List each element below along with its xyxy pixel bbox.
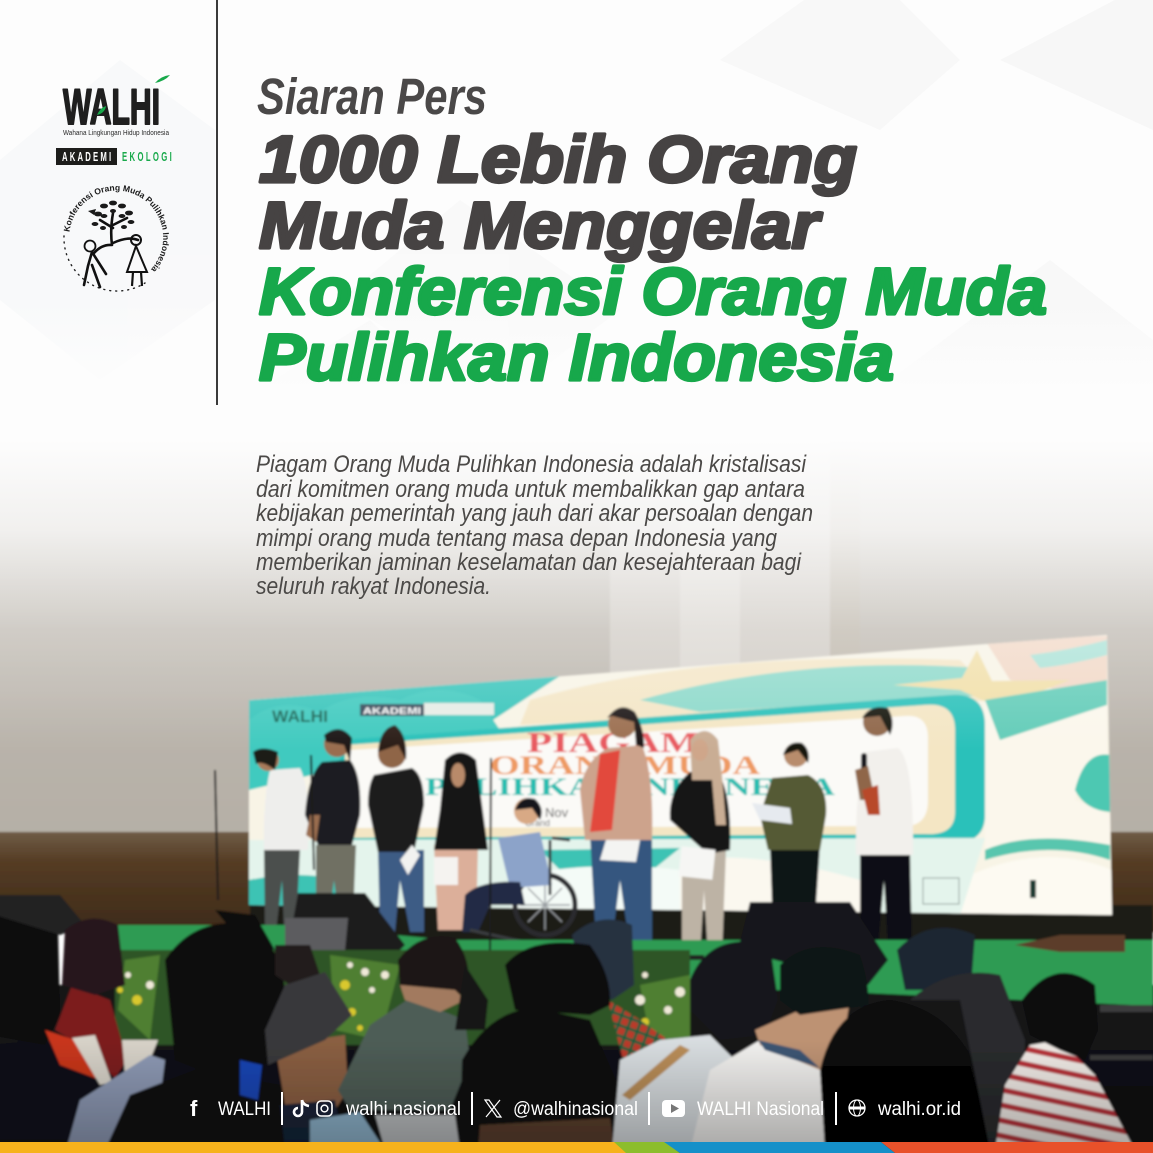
audience: far-left person [0,895,105,1150]
body paragraph: seluruh rakyat Indonesia. [256,573,491,600]
screen: lower illustration [249,838,985,915]
Konferensi Orang Muda emblem: Konferensi Orang Muda Pulihkan Indonesia [64,185,169,272]
body paragraph [256,451,813,600]
screen: title text: PIAGAM [527,728,699,759]
photo: microphone stands [215,755,491,950]
vertical divider [216,0,218,405]
photo: right floor speaker [738,902,888,985]
Akademi Ekologi badge: EKOLOGI [122,151,174,165]
title [259,122,1047,394]
Akademi Ekologi badge: AKADEMI [62,151,113,165]
heading: Siaran Pers: Siaran Pers [257,68,487,125]
TikTok and Instagram [294,1099,461,1120]
Facebook: WALHI [218,1099,271,1120]
audience: grey shirt man [338,936,488,1110]
logo column [56,75,174,292]
photo: wood panel band [0,832,1153,932]
body paragraph: kebijakan pemerintah yang jauh dari akar persoalan dengan [256,500,813,527]
website: walhi.or.id [877,1099,961,1120]
audience: striped shirt [995,973,1135,1150]
photo: LED screen: AKADEMI [363,706,421,716]
person 6: tall man [580,707,652,948]
audience: curly head [897,928,975,990]
YouTube: WALHI Nasional [697,1099,824,1120]
photo: stage skirt [250,905,1153,943]
photo: LED screen: Grand [525,818,550,828]
photo: hall wall [0,400,1153,840]
body paragraph: memberikan jaminan keselamatan dan kesejahteraan bagi [256,549,802,576]
audience: hijab woman in red [45,919,127,1080]
audience: second white shirt [690,947,868,1150]
social media footer [190,1092,961,1125]
TikTok and Instagram: walhi.nasional [345,1099,461,1120]
title line 3 green: Konferensi Orang Muda [259,254,1047,328]
photo: flower arrangement [115,950,690,1045]
WALHI logo [63,75,170,137]
person 4: hijab woman [434,752,488,930]
person 7: beige hijab [670,731,730,955]
photo: guitar on stage [1015,935,1125,952]
audience: stage steps highlight [1090,1005,1153,1060]
photo: audience centre [460,919,668,1150]
colour bar [0,1142,1153,1153]
person 1 [253,748,309,932]
event photo: stage and audience [0,484,1153,1153]
body paragraph: mimpi orang muda tentang masa depan Indonesia yang [256,525,778,552]
Facebook [190,1096,271,1121]
photo: audience right [612,928,1153,1150]
Akademi Ekologi badge [56,148,174,165]
audience: cap man [240,945,352,1150]
photo: green stage floor [115,925,1153,1006]
body paragraph: Piagam Orang Muda Pulihkan Indonesia adalah kristalisasi [256,451,807,478]
screen: star [894,650,1067,701]
X: @walhinasional [513,1099,638,1120]
background triangle pattern [0,0,1153,440]
audience: cap and plaid shirt [572,919,668,1068]
audience: big dark head [105,910,310,1150]
WALHI logo: Wahana Lingkungan Hidup Indonesia [63,130,169,137]
audience: central black hair [460,1008,620,1150]
person 3 [368,725,424,932]
screen: teal frame [340,695,985,848]
person 5: wheelchair user [462,798,575,950]
photo: dark audience base [0,985,1153,1153]
audience: white shirt with bag strap [612,942,778,1150]
audience: light-blue sleeve and seat back [310,1112,460,1150]
photo: LED screen: Nov [545,805,569,820]
photo: LED screen: ORANG MUDA [490,751,760,780]
photo: left floor speaker [285,893,405,965]
title line 1: 1000 Lebih Orang [259,122,857,196]
person 9: speaker with microphone [855,707,913,948]
WALHI logo: WALHI [63,79,160,135]
white fade over photo [0,300,1153,750]
screen: logos: WALHI [272,707,328,726]
photo: LED screen: PULIHKAN INDONESIA [425,774,835,801]
audience: chairs [72,1035,158,1085]
audience: grey hair [910,973,1025,1150]
person 8: olive shirt [752,742,826,905]
Facebook: f [190,1096,198,1121]
audience: patterned shirt [66,1055,165,1150]
body paragraph: dari komitmen orang muda untuk membalikkan gap antara [256,476,805,503]
screen: right-side clouds [985,690,1110,860]
title line 4 green: Pulihkan Indonesia [259,320,894,394]
photo: people on stage [253,707,913,955]
audience: large black head [820,1000,990,1150]
photo: stage shoes [650,950,704,962]
title line 2: Muda Menggelar [259,188,823,262]
photo: lower shade [0,1040,1153,1150]
photo: LED screen [240,630,1120,920]
audience: dark-haired head [505,942,610,1015]
photo: audience left [0,895,488,1150]
person 2 [305,729,360,895]
